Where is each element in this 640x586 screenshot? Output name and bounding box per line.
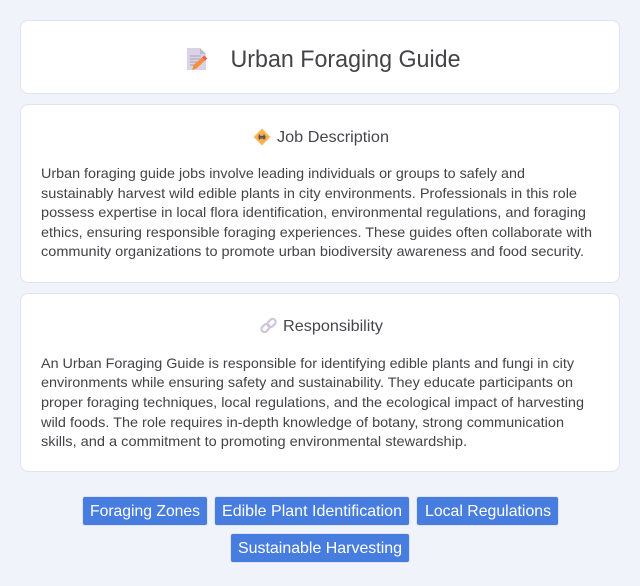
- icon: document with pencil: [187, 48, 208, 70]
- heading: job description: Job Description: [277, 128, 389, 146]
- tag: foraging zones: [82, 496, 208, 526]
- text block: job description: Urban foraging guide jobs involve leading individuals or groups to safely and: [41, 165, 525, 181]
- text block: responsibility: [40, 355, 584, 449]
- title: Urban Foraging Guide: [230, 46, 460, 73]
- panel: job description: [20, 104, 620, 283]
- icon: diamond road sign: [254, 128, 270, 146]
- icon: chain link: [260, 318, 277, 334]
- text block: responsibility: skills, and a commitment to promoting environmental stewardship.: [41, 433, 467, 449]
- tag: sustainable harvesting: Sustainable Harvesting: [238, 540, 402, 556]
- panel: responsibility: [20, 293, 620, 472]
- text block: job description: [41, 165, 592, 259]
- text block: responsibility: proper foraging techniques, local regulations, and the ecological impact of harvesting: [41, 394, 584, 410]
- text block: job description: ethics, ensuring responsible foraging experiences. These guides often collaborate with: [41, 224, 592, 240]
- tag: edible plant identification: Edible Plant Identification: [222, 502, 402, 520]
- heading: responsibility: Responsibility: [283, 318, 383, 334]
- text block: responsibility: wild foods. The role requires in-depth knowledge of botany, strong communication: [40, 414, 564, 430]
- tag: local regulations: [416, 496, 559, 526]
- tag: sustainable harvesting: [230, 532, 410, 562]
- tag: local regulations: Local Regulations: [425, 502, 551, 520]
- tag: edible plant identification: [214, 496, 410, 526]
- text block: responsibility: environments while ensuring safety and sustainability. They educate participants on: [41, 374, 573, 390]
- tag: foraging zones: Foraging Zones: [90, 502, 200, 520]
- text block: job description: sustainably harvest wild edible plants in city environments. Professionals in this role: [41, 185, 577, 201]
- text block: job description: community organizations to promote urban biodiversity awareness and food security.: [41, 243, 584, 259]
- panel: title card: [20, 20, 620, 94]
- text block: job description: possess expertise in local flora identification, environmental regulations, and foraging: [41, 204, 586, 220]
- text block: responsibility: An Urban Foraging Guide is responsible for identifying edible plants and fungi in city: [41, 355, 574, 371]
